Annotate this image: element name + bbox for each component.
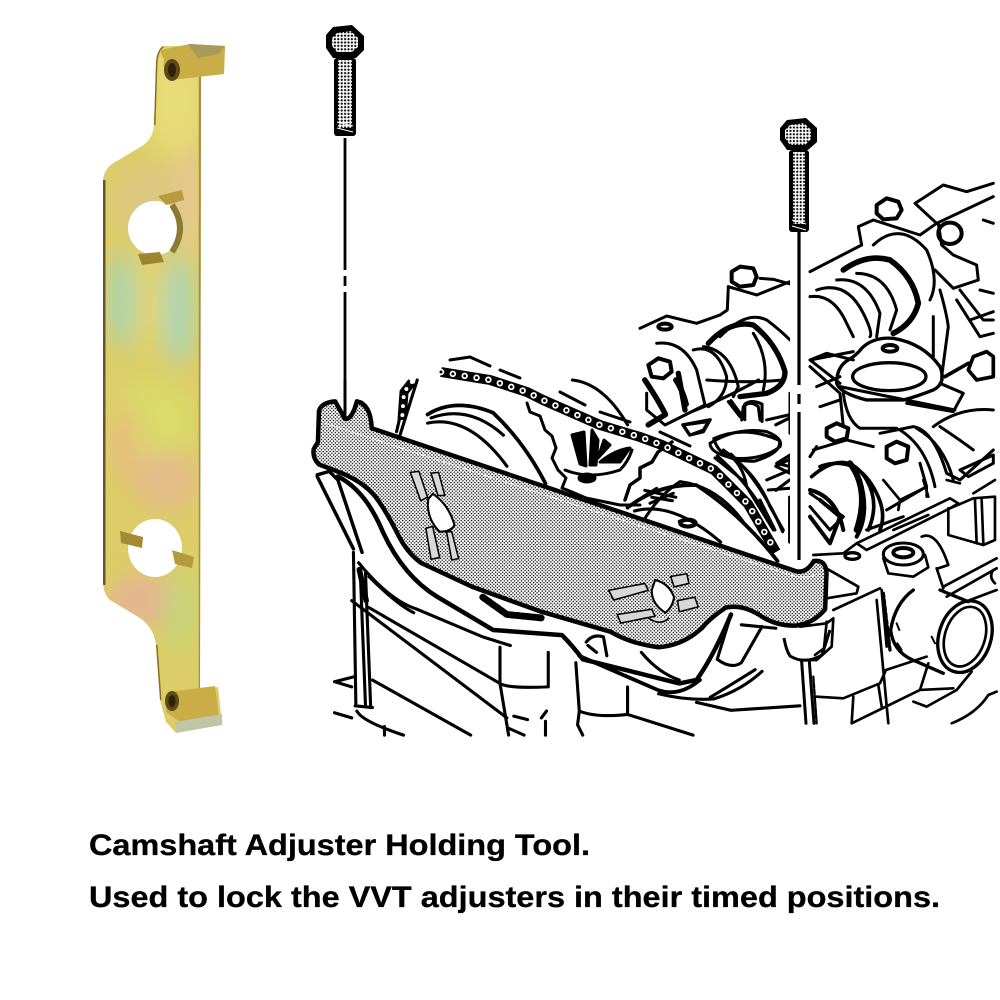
tool photo: camshaft holding plate	[103, 44, 225, 733]
engine: sprocket hub, burst and teeth	[527, 403, 672, 505]
bottom hole	[120, 519, 194, 577]
caption line 1: Camshaft Adjuster Holding Tool.	[89, 829, 590, 862]
bolt: right	[780, 118, 817, 232]
bar cutout: right hole and pins	[609, 574, 698, 623]
engine: lower block below bar	[317, 471, 800, 735]
caption line 2: Used to lock the VVT adjusters in their timed positions.	[89, 881, 940, 914]
engine line drawing	[317, 183, 1000, 735]
left bolt shaft in slot	[344, 380, 346, 418]
holding tool bar (dotted)	[313, 401, 827, 647]
timing chain	[402, 357, 776, 552]
top hole	[128, 190, 184, 265]
top tab	[160, 44, 225, 81]
caption	[89, 829, 940, 914]
engine upper: camshafts left of bolt	[640, 267, 790, 530]
engine upper: camshafts right of bolt	[810, 183, 993, 530]
bar cutout: left hole and pins	[410, 471, 459, 560]
bolt: left	[326, 25, 364, 136]
bolt line: left (with gap)	[344, 138, 346, 418]
bolt halo: right	[790, 232, 806, 562]
engine: sprockets above bar	[397, 380, 790, 561]
engine: right side bracket, boss and water port	[800, 480, 1000, 723]
bottom bolt shank below bar	[784, 630, 830, 660]
bottom tab	[165, 686, 222, 733]
bolt line: right (with gap)	[797, 232, 801, 560]
